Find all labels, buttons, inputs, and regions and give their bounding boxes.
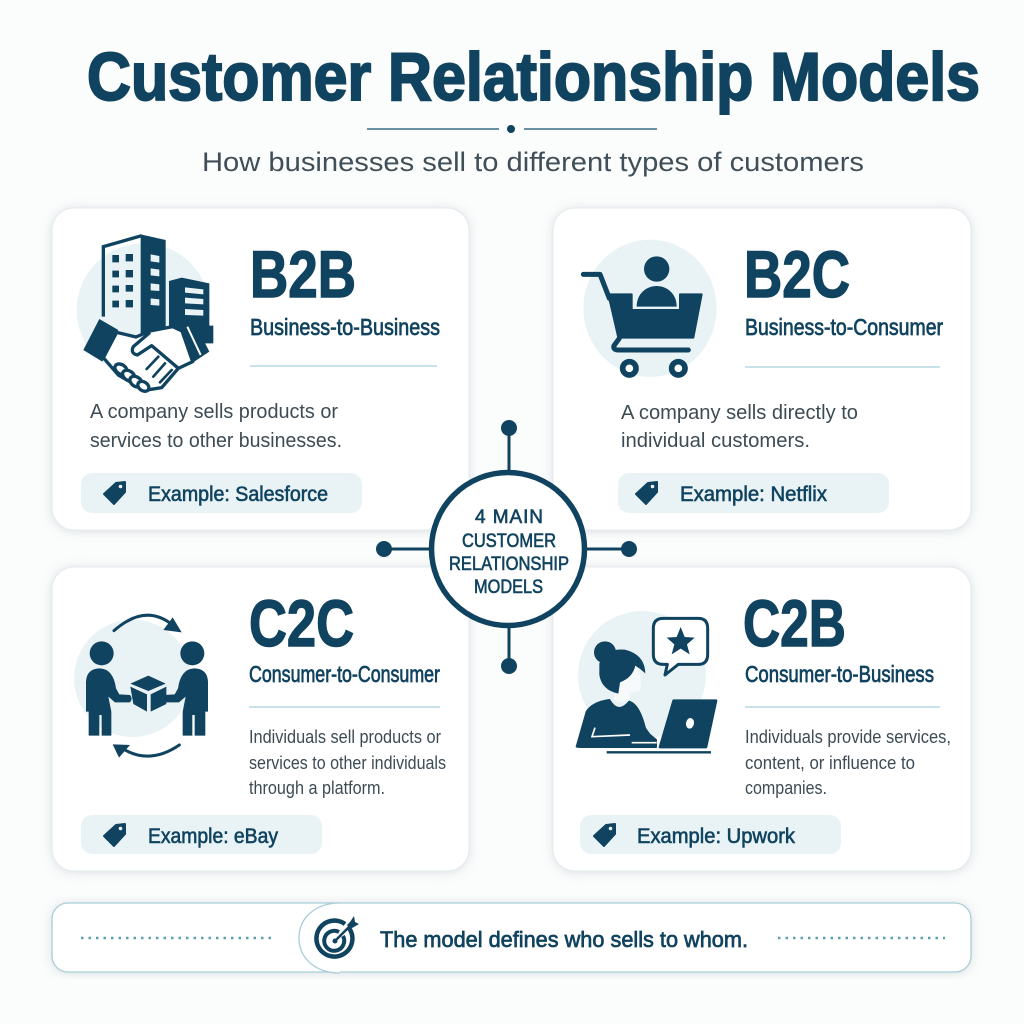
description: content, or influence to [745,752,915,773]
example pill [580,815,841,854]
example pill [618,473,889,513]
hub label: RELATIONSHIP [449,554,569,575]
central hub [378,422,636,672]
takeaway text: The model defines who sells to whom. [380,927,748,952]
example pill: Example: Netflix [680,483,827,506]
icon: two people exchanging a box [74,615,208,758]
dotted line left [81,937,272,939]
description [745,726,951,798]
subtitle: How businesses sell to different types of customers [202,147,864,177]
example pill: Example: Upwork [637,825,795,848]
icon: target with arrow [316,916,359,957]
example pill: Example: Salesforce [148,483,328,506]
description: services to other businesses. [90,430,342,452]
icon: buildings and handshake [77,234,213,393]
example pill [81,473,362,513]
panel: B2C [553,208,971,530]
description [249,726,446,798]
hub label: CUSTOMER [462,531,556,552]
description [621,402,858,452]
icon: shopping cart with customer [583,240,717,377]
description: Individuals sell products or [249,726,441,747]
subheading: Business-to-Consumer [745,314,943,340]
heading: C2C: C2C [249,586,354,660]
description: Individuals provide services, [745,726,951,747]
heading: C2B: C2B [743,586,846,660]
hub label: MODELS [474,577,543,598]
subheading: Consumer-to-Business [745,661,934,687]
description: companies. [745,777,827,798]
subheading: Consumer-to-Consumer [249,661,440,687]
hub label [449,507,569,598]
panel: C2B [553,567,971,871]
hub label: 4 MAIN [475,507,543,528]
description: individual customers. [621,430,810,452]
panel: B2B [52,208,469,530]
description: through a platform. [249,777,385,798]
description: A company sells products or [90,401,338,423]
example pill: Example: eBay [148,825,278,848]
panel: C2C [52,567,469,871]
description [90,401,342,452]
takeaway banner [52,903,971,973]
dotted line right [778,937,945,939]
subheading: Business-to-Business [250,314,440,340]
title divider [367,125,657,133]
hub circle [432,472,584,626]
description: services to other individuals [249,752,446,773]
icon: woman at laptop with star review [577,611,716,752]
description: A company sells directly to [621,402,858,424]
heading: B2B: B2B [250,237,356,311]
example pill [81,815,322,854]
heading: B2C: B2C [744,237,850,311]
hub connectors [378,422,636,672]
